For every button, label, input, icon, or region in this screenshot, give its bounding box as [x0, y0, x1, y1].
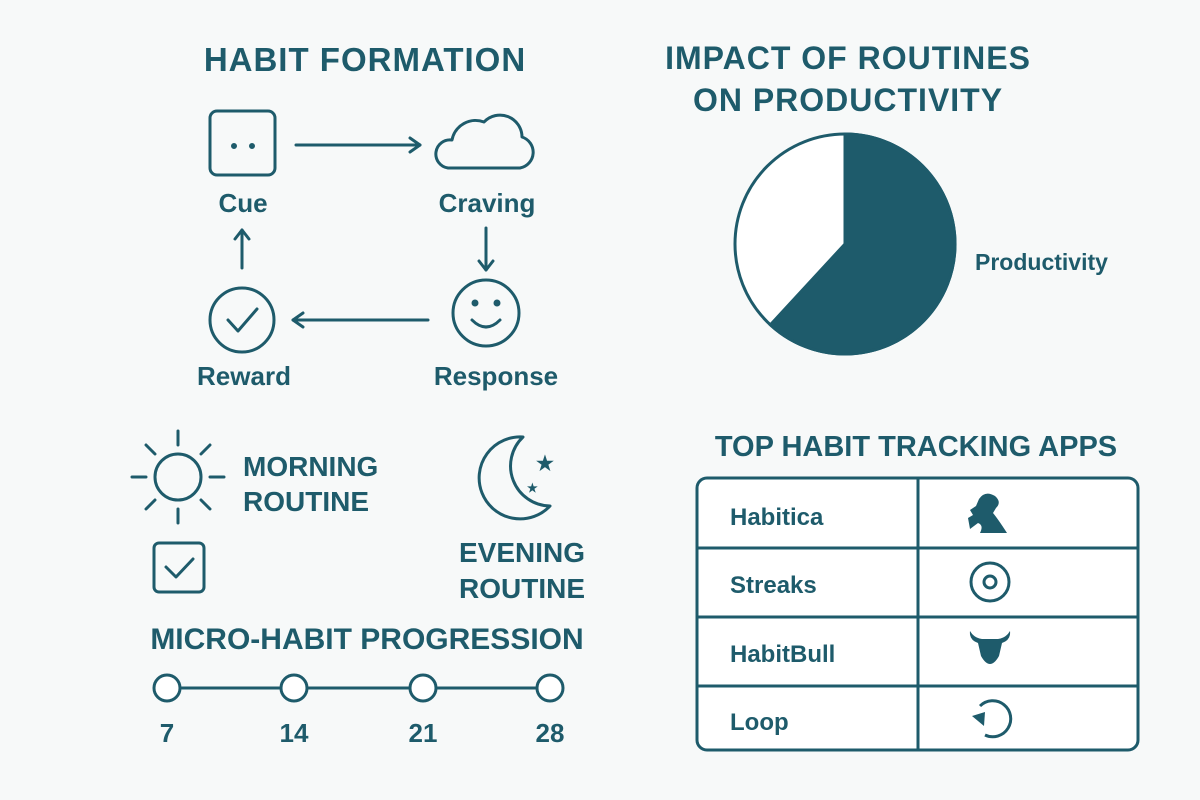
icon: smiley [453, 280, 519, 346]
icon: cue square [210, 111, 275, 175]
arrow: cue to craving [296, 138, 420, 152]
habit loop diagram [210, 111, 533, 352]
timeline [154, 675, 564, 748]
table: apps [697, 478, 1138, 750]
title: habit formation: HABIT FORMATION [204, 41, 526, 78]
table: apps: HabitBull [730, 641, 835, 668]
pie chart [735, 134, 955, 354]
table: apps: Loop [730, 709, 789, 736]
icon: moon and stars: ★ [536, 453, 554, 475]
icon: checkbox [154, 543, 204, 592]
timeline: 7 [160, 718, 174, 748]
text: ROUTINE [459, 573, 585, 604]
text: ROUTINE [243, 486, 369, 517]
heading: top habit tracking apps: TOP HABIT TRACKING APPS [715, 431, 1117, 463]
pie label: Productivity [975, 249, 1108, 275]
label: response: Response [434, 361, 558, 391]
icon: moon and stars: ★ [527, 481, 538, 495]
heading: micro-habit progression: MICRO-HABIT PROGRESSION [150, 623, 584, 656]
label: cue: Cue [218, 188, 268, 218]
title: impact of routines: IMPACT OF ROUTINES [665, 40, 1031, 76]
icon: cloud [436, 115, 533, 168]
label: reward: Reward [197, 361, 291, 391]
label: craving: Craving [439, 188, 535, 218]
arrow: response to reward [293, 313, 428, 327]
table: apps: Habitica [730, 504, 824, 531]
icon: reward check [210, 288, 274, 352]
icon: moon and stars [479, 437, 554, 519]
heading: evening routine: EVENING [459, 537, 585, 568]
icon: streaks [971, 563, 1009, 601]
arrow: craving to response [479, 228, 493, 270]
heading: morning routine: MORNING [243, 451, 378, 482]
icon: habitica [968, 494, 1007, 533]
timeline: 28 [536, 718, 564, 748]
table: apps: Streaks [730, 572, 817, 599]
timeline: 21 [409, 718, 437, 748]
text: ON PRODUCTIVITY [693, 82, 1003, 118]
icon: sun [132, 431, 224, 523]
timeline: 14 [280, 718, 309, 748]
icon: habitbull [970, 631, 1010, 664]
arrow: reward to cue [235, 230, 249, 268]
icon: loop [980, 701, 1011, 737]
